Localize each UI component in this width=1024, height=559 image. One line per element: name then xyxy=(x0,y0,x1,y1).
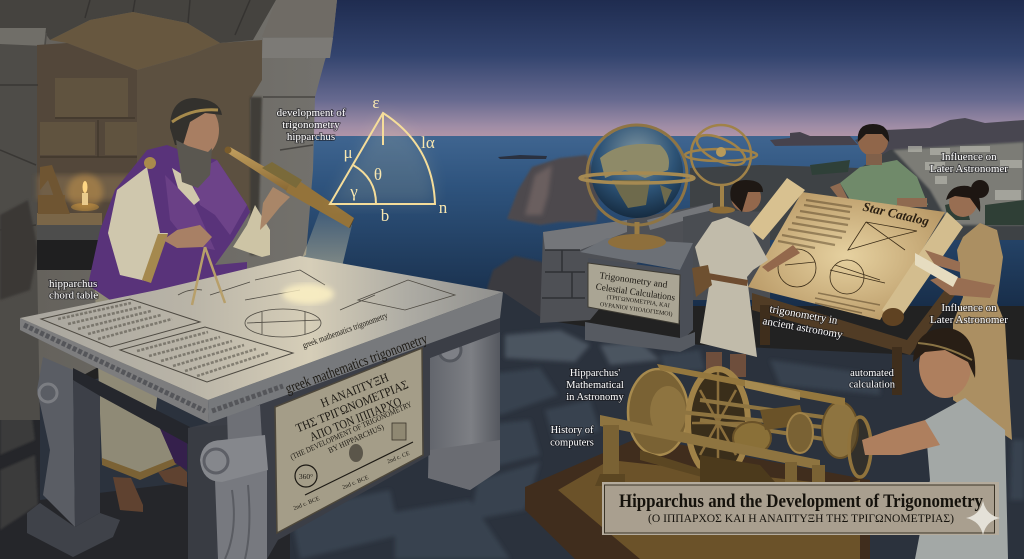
plaque: development of trigonometry: 360° xyxy=(299,472,313,481)
light beam from telescope xyxy=(288,205,352,296)
plaque: development of trigonometry: 2nd c. CE xyxy=(386,451,411,465)
right body xyxy=(188,318,500,559)
table top xyxy=(20,256,503,400)
telescope xyxy=(224,146,354,228)
frame front beam xyxy=(600,415,820,470)
hand wheel xyxy=(849,417,871,477)
purple cloak xyxy=(88,145,250,300)
wooden work table xyxy=(525,437,870,559)
label: automated calculation: calculation xyxy=(849,380,896,390)
right scroll roll xyxy=(882,212,963,323)
label: development of trigonometry hipparchus: hipparchus xyxy=(287,131,335,143)
pedestal xyxy=(580,238,695,352)
marble table xyxy=(20,256,503,559)
label: history of computers: computers xyxy=(550,438,594,448)
plaque heading: BY HIPPARCHUS) xyxy=(327,422,385,455)
young man at the mechanism xyxy=(862,328,1008,559)
glowing trigonometry diagram: b xyxy=(381,206,389,225)
spoked wheel xyxy=(688,369,748,477)
shelf with candle xyxy=(37,165,103,270)
star catalog scroll xyxy=(748,178,963,326)
label: influence on later astronomer (top): Influence on xyxy=(941,151,997,163)
boy in green tunic xyxy=(830,124,928,218)
banner title: Hipparchus and the Development of Trigonometry xyxy=(619,491,983,512)
background: night sky xyxy=(300,0,1024,138)
glowing trigonometry diagram: lα xyxy=(421,133,435,152)
banner subtitle: (Ο ΙΠΠΑΡΧΟΣ ΚΑΙ Η ΑΝΑΠΤΥΞΗ ΤΗΣ ΤΡΙΓΩΝΟΜΕΤΡΙΑΣ) xyxy=(648,513,954,525)
plaque: trigonometry and celestial calculations: (ΤΡΙΓΩΝΟΜΕΤΡΙΑ, ΚΑΙ xyxy=(606,294,670,309)
plaque: trigonometry and celestial calculations: Celestial Calculations xyxy=(595,283,676,304)
purple cloak behind xyxy=(155,417,187,470)
label: hipparchus chord table: hipparchus xyxy=(49,278,97,290)
compass xyxy=(192,247,225,305)
glowing trigonometry diagram: ε xyxy=(372,93,380,112)
cream tunic arm xyxy=(108,167,168,282)
glowing trigonometry diagram: θ xyxy=(374,165,382,184)
scroll table xyxy=(752,287,955,395)
label: influence on later astronomer (lower): Later Astronomer xyxy=(930,314,1008,326)
right disc xyxy=(822,402,858,458)
label: hipparchus' mathematical in astronomy: Hipparchus' xyxy=(570,368,620,379)
glowing spot xyxy=(282,284,334,304)
left leg xyxy=(27,357,120,557)
hand xyxy=(163,225,212,248)
brass geared mechanism xyxy=(558,364,871,559)
label: hipparchus chord table: chord table xyxy=(49,290,98,302)
lower gear cluster xyxy=(700,455,775,482)
sandals xyxy=(113,466,187,512)
front-left edge with key pattern xyxy=(20,318,209,423)
frame top beam xyxy=(657,364,845,406)
right edge xyxy=(208,292,503,423)
sparkle icon xyxy=(966,501,1000,535)
plaque: trigonometry and celestial calculations xyxy=(588,263,680,324)
plaque: trigonometry and celestial calculations: ΟΥΡΑΝΙΟΙ ΥΠΟΛΟΓΙΣΜΟΙ) xyxy=(599,301,673,318)
chord tables engraved on top xyxy=(41,270,455,382)
title banner xyxy=(602,482,999,535)
carved inscription on edge: greek mathematics trigonometry xyxy=(283,331,430,397)
background: stone terrace floor xyxy=(0,290,1024,559)
label: influence on later astronomer (lower): Influence on xyxy=(941,302,997,314)
plaque heading xyxy=(289,370,413,462)
plaque: development of trigonometry: 2nd c. BCE xyxy=(342,475,370,491)
plaque heading: ΑΠΟ ΤΟΝ ΙΠΠΑΡΧΟ xyxy=(307,394,404,444)
label: trigonometry in ancient astronomy: trigonometry in xyxy=(769,303,839,327)
glowing trigonometry diagram xyxy=(330,93,448,225)
tunic skirt xyxy=(95,285,175,478)
glowing trigonometry diagram: γ xyxy=(349,182,358,201)
centre leg xyxy=(188,405,268,559)
terrestrial globe xyxy=(580,125,694,250)
plaque heading: Η ΑΝΑΠΤΥΞΗ xyxy=(319,370,391,410)
large disc wheel xyxy=(628,369,688,455)
label: history of computers: History of xyxy=(551,425,593,436)
label: hipparchus' mathematical in astronomy: Mathematical xyxy=(566,380,624,391)
label: influence on later astronomer (top): Later Astronomer xyxy=(930,163,1008,175)
plaque heading: ΤΗΣ ΤΡΙΓΩΝΟΜΕΤΡΙΑΣ xyxy=(294,377,410,435)
label: trigonometry in ancient astronomy: ancient astronomy xyxy=(762,315,844,341)
plaque: development of trigonometry xyxy=(275,348,423,533)
geometric diagrams xyxy=(848,222,917,250)
armillary sphere xyxy=(685,125,757,214)
cloak clasp xyxy=(144,157,156,169)
inscription on table top: greek mathematics trigonometry xyxy=(301,310,389,350)
star catalog title: Star Catalog xyxy=(861,199,931,229)
stone arch and wall xyxy=(0,0,337,420)
background: sea xyxy=(300,136,1024,306)
label: development of trigonometry hipparchus: trigonometry xyxy=(282,119,340,131)
plaque heading: (THE DEVELOPMENT OF TRIGONOMETRY xyxy=(289,400,413,462)
label: hipparchus' mathematical in astronomy: in Astronomy xyxy=(566,392,624,403)
plaque: trigonometry and celestial calculations: Trigonometry and xyxy=(599,271,668,291)
back apron under table xyxy=(73,368,190,445)
right leg xyxy=(428,330,500,490)
left scroll roll xyxy=(748,178,805,240)
head xyxy=(175,102,219,158)
plaque timeline xyxy=(305,442,413,495)
glowing trigonometry diagram: μ xyxy=(343,143,353,162)
background: distant coast and town xyxy=(690,118,1024,240)
label: trigonometry in ancient astronomy xyxy=(762,303,844,341)
base plinth xyxy=(558,460,860,559)
label: automated calculation: automated xyxy=(850,368,894,379)
raised arm sleeve xyxy=(233,205,270,257)
background: rocky shore xyxy=(480,256,550,340)
woman writing xyxy=(915,180,1012,440)
glowing trigonometry diagram: n xyxy=(439,198,448,217)
inner gears and rods xyxy=(680,400,850,440)
figure: Hipparchus xyxy=(88,98,290,512)
stone balustrade wall xyxy=(540,203,770,323)
boy with white tunic xyxy=(692,180,800,377)
plaque: development of trigonometry: 2nd c. BCE xyxy=(293,496,321,512)
chest opening xyxy=(172,168,200,205)
background: islet xyxy=(498,155,547,159)
catalog text block xyxy=(778,200,852,248)
background: sea cliff xyxy=(507,155,600,225)
label: development of trigonometry hipparchus: development of xyxy=(277,107,345,119)
